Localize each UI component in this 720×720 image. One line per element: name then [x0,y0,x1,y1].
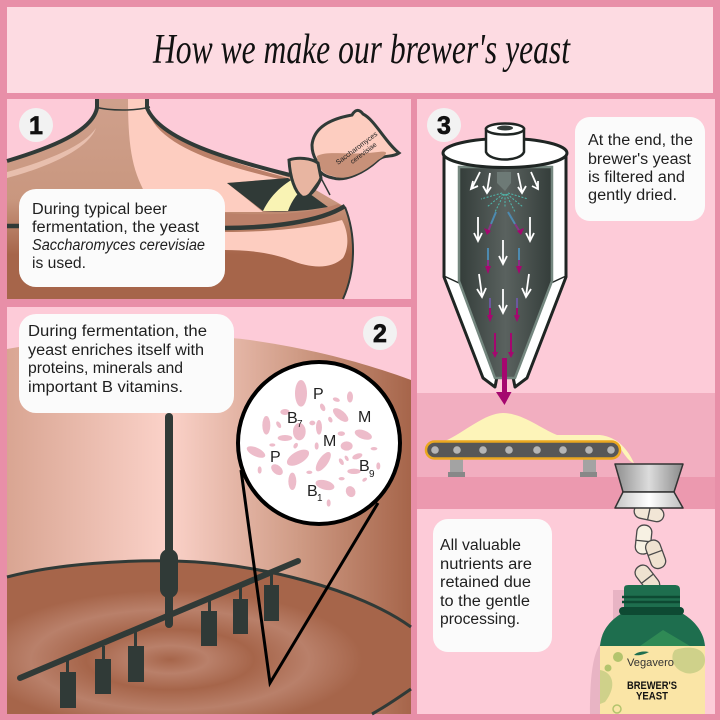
number 2 [363,316,397,350]
bag label: cerevisiae [349,141,378,166]
text box 4: retained due [440,574,531,591]
text box 2 [19,314,234,413]
product bottle [590,585,705,714]
capsules [632,503,668,595]
text box 3 [575,117,705,221]
text box 2: During fermentation, the [28,323,207,340]
tank light reflection [128,99,290,212]
magnifier circle [238,362,400,524]
panel 1: fermentation tank [7,99,411,299]
panel 3: drying and packing [417,99,715,714]
text box 3: brewer's yeast [588,151,692,168]
text box 3: gently dried. [588,187,677,204]
white air arrows [471,172,538,313]
tank body [7,99,353,299]
number 2: 2 [373,320,387,348]
nutrient letters: M [323,433,336,450]
brand: Vegavero [627,657,674,669]
stirrer arm [20,561,298,678]
yeast pouring [263,173,308,211]
liquid surface [7,561,411,714]
spray dryer [443,124,567,405]
yeast bag [289,110,399,197]
dryer inlet [486,129,524,160]
nutrient letters: B [359,458,370,475]
number 3 [427,108,461,142]
nutrient letters: M [358,409,371,426]
nutrient letters [270,386,375,504]
number 1 [19,108,53,142]
bottle label [600,646,705,714]
nutrient letters: B [307,483,318,500]
text box 1: fermentation, the yeast [32,219,200,236]
text box 3: is filtered and [588,169,685,186]
product name: BREWER'S [627,680,677,692]
tank outline [7,99,290,175]
text box 4: All valuable [440,537,521,554]
hopper [615,464,683,508]
stirrer paddles [60,573,279,708]
spray [481,193,528,212]
text box 2: yeast enriches itself with [28,342,204,359]
text box 4 [433,519,552,652]
number 1: 1 [29,112,43,140]
panel 2: tank interior [7,307,411,714]
text box 2: important B vitamins. [28,379,183,396]
nutrient letters: 9 [369,469,375,480]
text box 4: nutrients are [440,556,532,573]
main output arrow [496,358,512,405]
nutrient letters: B [287,410,298,427]
title panel [7,7,713,93]
bottle label: YEAST [636,690,668,702]
yeast powder [445,413,634,463]
nutrient letters: P [270,449,281,466]
nutrient letters: 7 [297,419,303,430]
text box 4: to the gentle [440,593,530,610]
bag label: Saccharomyces [335,131,380,167]
text box 1 [19,189,225,287]
text box 1: is used. [32,255,86,272]
text box 2: proteins, minerals and [28,360,183,377]
text box 1: During typical beer [32,201,167,218]
text box 4: processing. [440,611,520,628]
conveyor belt [426,442,620,477]
tank wall [7,335,411,714]
nutrient letters: P [313,386,324,403]
text box 3: At the end, the [588,132,693,149]
nutrient letters: 1 [317,493,323,504]
number 3: 3 [437,112,451,140]
title: How we make our brewer's yeast [152,27,571,73]
product arrows [488,212,520,354]
stirrer shaft [20,413,298,708]
magnifier lines [241,470,378,683]
text box 1: Saccharomyces cerevisiae [32,237,205,254]
nozzle [497,172,511,191]
tank opening [227,178,328,212]
